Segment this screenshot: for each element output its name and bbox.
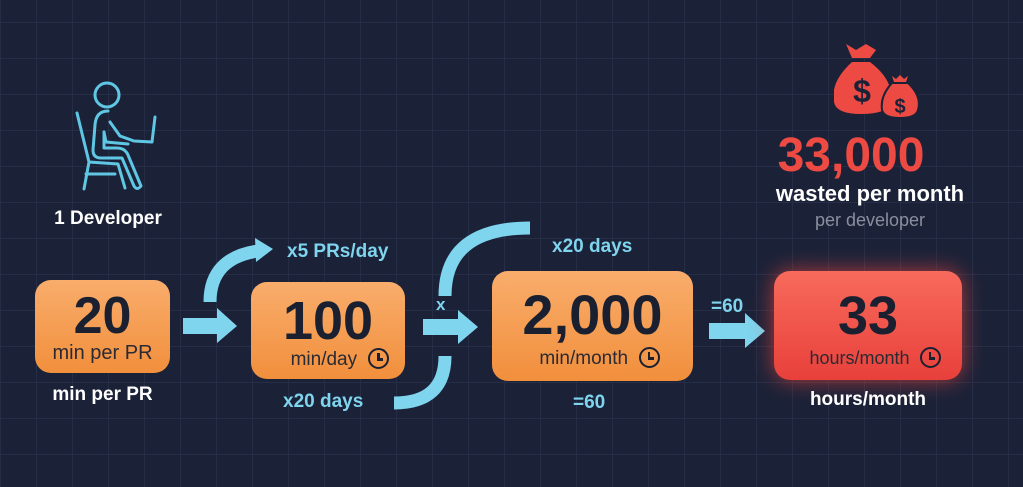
text: =60 under: =60 — [573, 392, 605, 413]
box: 2,000 min/month — [492, 271, 693, 381]
box: 20 min per PR — [35, 280, 170, 373]
box: 33 hours/month — [774, 271, 962, 380]
text: =60 arrow: =60 — [711, 296, 743, 317]
icon: developer at laptop — [76, 82, 156, 190]
icon: money bags — [834, 44, 918, 119]
text: min per PR label: min per PR — [52, 384, 153, 405]
text: wasted per month: wasted per month — [776, 181, 964, 206]
icon: money bags: $ — [853, 73, 871, 109]
box: 2,000 min/month: 2,000 — [522, 283, 663, 346]
text: 33,000: 33,000 — [778, 129, 924, 182]
box: 2,000 min/month: min/month — [539, 348, 628, 369]
box: 33 hours/month: hours/month — [809, 348, 910, 368]
box: 33 hours/month: 33 — [838, 286, 898, 346]
text: x20 days upper: x20 days — [552, 236, 632, 257]
text: x: x — [436, 295, 445, 314]
text: x5 PRs/day: x5 PRs/day — [287, 241, 388, 262]
text: 1 Developer: 1 Developer — [54, 208, 162, 229]
icon: money bags: $ — [894, 96, 906, 118]
text: per developer: per developer — [815, 210, 925, 230]
box: 100 min/day: min/day — [291, 349, 357, 370]
box: 20 min per PR: 20 — [74, 287, 131, 345]
text: x20 days lower: x20 days — [283, 391, 363, 412]
box: 100 min/day: 100 — [283, 291, 373, 351]
box: 100 min/day — [251, 282, 405, 379]
box: 20 min per PR: min per PR — [52, 342, 153, 364]
text: hours/month label: hours/month — [810, 389, 926, 410]
